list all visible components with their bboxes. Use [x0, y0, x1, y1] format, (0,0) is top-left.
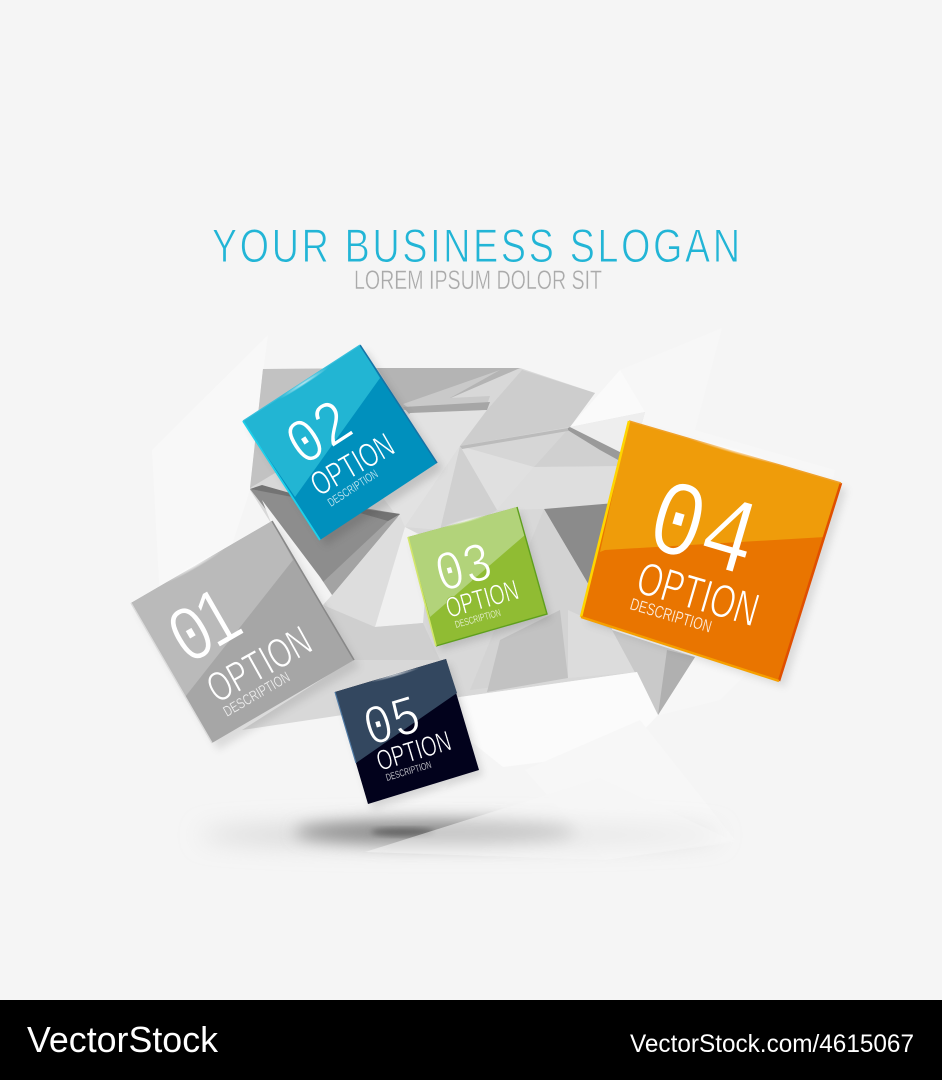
option label 01: OPTION [199, 616, 319, 712]
option label 03: OPTION [442, 574, 522, 625]
card 05 [335, 659, 483, 809]
card 01 [131, 521, 360, 750]
number 05: 05 [357, 685, 429, 763]
option label 02: OPTION [304, 426, 401, 504]
number 03: 03 [429, 532, 500, 609]
number 04: 04 [634, 460, 770, 607]
description 01: DESCRIPTION [220, 669, 293, 720]
card 04 [581, 421, 847, 687]
option label 04: OPTION [631, 551, 765, 636]
description 03: DESCRIPTION [454, 608, 502, 631]
subtitle: LOREM IPSUM DOLOR SIT [354, 265, 602, 295]
low-poly abstract mesh [152, 328, 835, 860]
number 01: 01 [151, 569, 259, 687]
option label 05: OPTION [373, 725, 455, 778]
footer bar [0, 1000, 942, 1080]
title: YOUR BUSINESS SLOGAN [212, 220, 740, 273]
card 02 [243, 345, 443, 546]
number 02: 02 [274, 387, 368, 483]
card 03 [408, 507, 551, 651]
footer logo: VectorStock [27, 1019, 219, 1060]
description 02: DESCRIPTION [325, 467, 380, 510]
description 04: DESCRIPTION [628, 595, 714, 636]
floating shadow [200, 778, 735, 860]
description 05: DESCRIPTION [385, 760, 433, 784]
footer url: VectorStock.com/4615067 [630, 1030, 914, 1058]
